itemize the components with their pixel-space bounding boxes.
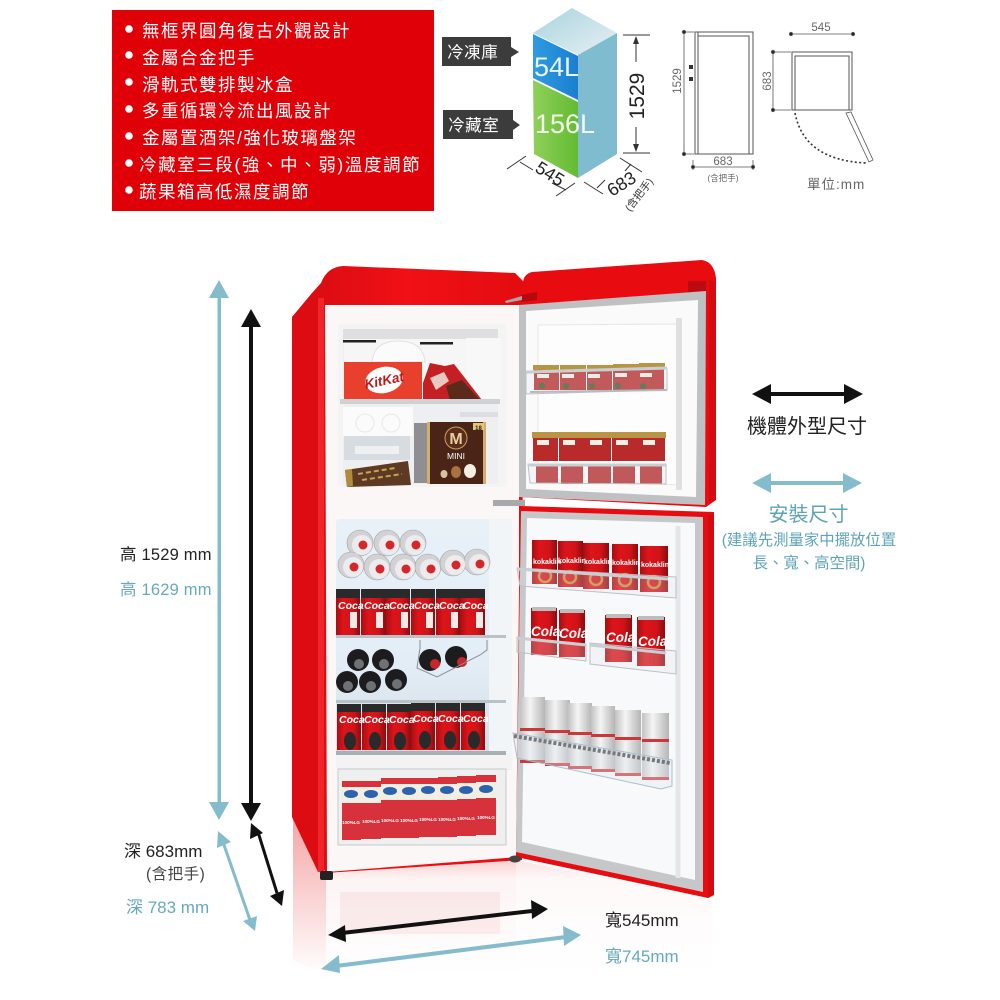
legend: install size: 長、寬、高空間) (753, 554, 865, 572)
hinge: upper (505, 292, 537, 303)
arrow: body depth (250, 823, 284, 906)
dimension: 683 depth (584, 158, 656, 214)
feature text lines: 滑軌式雙排製冰盒 (142, 75, 294, 95)
crisper drawer: 100%LG (438, 817, 456, 822)
foot: left (320, 871, 333, 880)
crisper drawer: 100%LG (342, 820, 360, 825)
kitkat packs (423, 363, 482, 400)
arrow: install depth (217, 831, 257, 931)
foot: right (509, 856, 521, 862)
crisper drawer: 100%LG (381, 818, 399, 823)
crisper drawer: 100%LG (400, 818, 418, 823)
dimension: 683 depth: (含把手) (622, 176, 656, 214)
label: body depth: 深 683mm (124, 842, 202, 861)
legend: body size: 機體外型尺寸 (747, 415, 867, 438)
wine bottles (336, 640, 487, 693)
feature text lines: 無框界圓角復古外觀設計 (142, 21, 351, 41)
arrow: install height (209, 280, 229, 820)
legend: body size (747, 384, 867, 438)
door bin: ice cream lower (528, 432, 666, 484)
dimension: 683 depth: 683 (604, 168, 640, 200)
legend: install size: (建議先測量家中擺放位置 (722, 531, 896, 549)
fridge: cabinet body (292, 266, 523, 873)
crisper drawer: 100%LG (419, 817, 437, 822)
shelf: cola row one: Coca (364, 600, 390, 612)
door bin: kokaklin cans: kokaklin (612, 560, 640, 567)
crisper drawer: 100%LG (457, 816, 475, 821)
dimension: 545 width: 545 (532, 157, 568, 190)
door bin: kokaklin cans: kokaklin (584, 559, 612, 566)
magnum box: 18 (475, 426, 482, 432)
feature text lines: 多重循環冷流出風設計 (142, 101, 332, 121)
crisper drawer: 100%LG (362, 819, 380, 824)
dimension: 1529 height: 1529 (626, 73, 649, 119)
fridge: upper door (519, 260, 716, 507)
shelf: cola row one: Coca (389, 600, 415, 612)
magnum box: M (449, 431, 463, 448)
shelf: cola row one (336, 589, 489, 635)
door bin: cola cans: Cola (638, 634, 668, 649)
shelf: cola row one: Coca (414, 600, 440, 612)
feature text lines (139, 21, 421, 202)
kitkat box (344, 362, 422, 400)
legend: install size (722, 473, 896, 572)
callout: freezer label (442, 37, 519, 66)
diagram: side view: 1529 (672, 68, 684, 94)
feature text lines: 金屬置酒架/強化玻璃盤架 (142, 128, 357, 148)
wafer pack (345, 461, 411, 487)
feature text lines: 蔬果箱高低濕度調節 (139, 182, 310, 202)
callout: fridge label (443, 110, 520, 139)
door bin: cola cans: Cola (559, 626, 589, 641)
fridge: freezer compartment (338, 324, 507, 487)
label: install width: 寬745mm (605, 947, 679, 966)
shelf: cola row two (337, 703, 489, 750)
door bin: silver cans (513, 697, 672, 789)
door bin: kokaklin cans (517, 540, 676, 598)
kitkat box: KitKat (363, 369, 406, 392)
arrow: body width (328, 900, 548, 942)
diagram: side view (672, 30, 755, 183)
callout: freezer label: 冷凍庫 (447, 43, 498, 62)
shelf: cola row two: Coca (339, 714, 365, 726)
ice tray (344, 436, 410, 460)
door bin: kokaklin cans: kokaklin (641, 562, 669, 569)
shelf: cola row two: Coca (413, 713, 439, 725)
magnum box: MINI (447, 451, 465, 461)
chart: capacity box: 54L (534, 52, 579, 82)
diagram: top view: 683 (762, 71, 774, 91)
shelf: cola row two: Coca (389, 714, 415, 726)
label: body height: 高 1529 mm (120, 545, 212, 564)
dimension: 545 width (507, 156, 575, 196)
panel: feature list (112, 10, 434, 211)
feature text lines: 冷藏室三段(強、中、弱)溫度調節 (139, 155, 421, 175)
shelf: cola row one: Coca (463, 600, 489, 612)
door bin: ice cream upper (526, 363, 667, 394)
door bin: cola cans (517, 607, 676, 674)
shelf: cola row two: Coca (463, 713, 489, 725)
crisper drawer: 100%LG (477, 815, 495, 820)
magnum box (414, 422, 486, 484)
fridge: lower door (513, 506, 714, 898)
diagram: side view: (含把手) (707, 173, 739, 183)
diagram: side view: 683 (713, 156, 733, 168)
chart: capacity box (533, 8, 617, 178)
shelf: cola row one: Coca (439, 600, 465, 612)
shelf: cola row one: Coca (338, 600, 364, 612)
label: handle note: (含把手) (146, 865, 205, 883)
arrow: install width (321, 926, 581, 973)
crisper drawer (338, 769, 506, 845)
dimension: 1529 height (623, 35, 650, 153)
callout: fridge label: 冷藏室 (448, 116, 499, 135)
chart: capacity box: 156L (535, 109, 595, 139)
diagram: top view: 545 (811, 22, 831, 34)
label: install depth: 深 783 mm (126, 898, 209, 917)
diagram: top view: 單位:mm (807, 177, 865, 192)
fridge reflection on floor (293, 817, 712, 975)
shelf: cola row two: Coca (364, 714, 390, 726)
door bin: cola cans: Cola (606, 630, 636, 645)
shelf: cola row two: Coca (438, 713, 464, 725)
door bin: kokaklin cans: kokaklin (533, 559, 561, 566)
label: body width: 寬545mm (605, 911, 679, 930)
hinge: middle (493, 500, 525, 506)
silver cans (338, 530, 490, 580)
arrow: body height (241, 309, 261, 821)
diagram: top view (762, 22, 873, 192)
label: install height: 高 1629 mm (120, 580, 212, 599)
door bin: cola cans: Cola (531, 624, 561, 639)
feature text lines: 金屬合金把手 (142, 48, 256, 68)
door bin: kokaklin cans: kokaklin (558, 558, 586, 565)
legend: install size: 安裝尺寸 (768, 503, 848, 526)
fridge: refrigerator compartment (336, 519, 512, 845)
